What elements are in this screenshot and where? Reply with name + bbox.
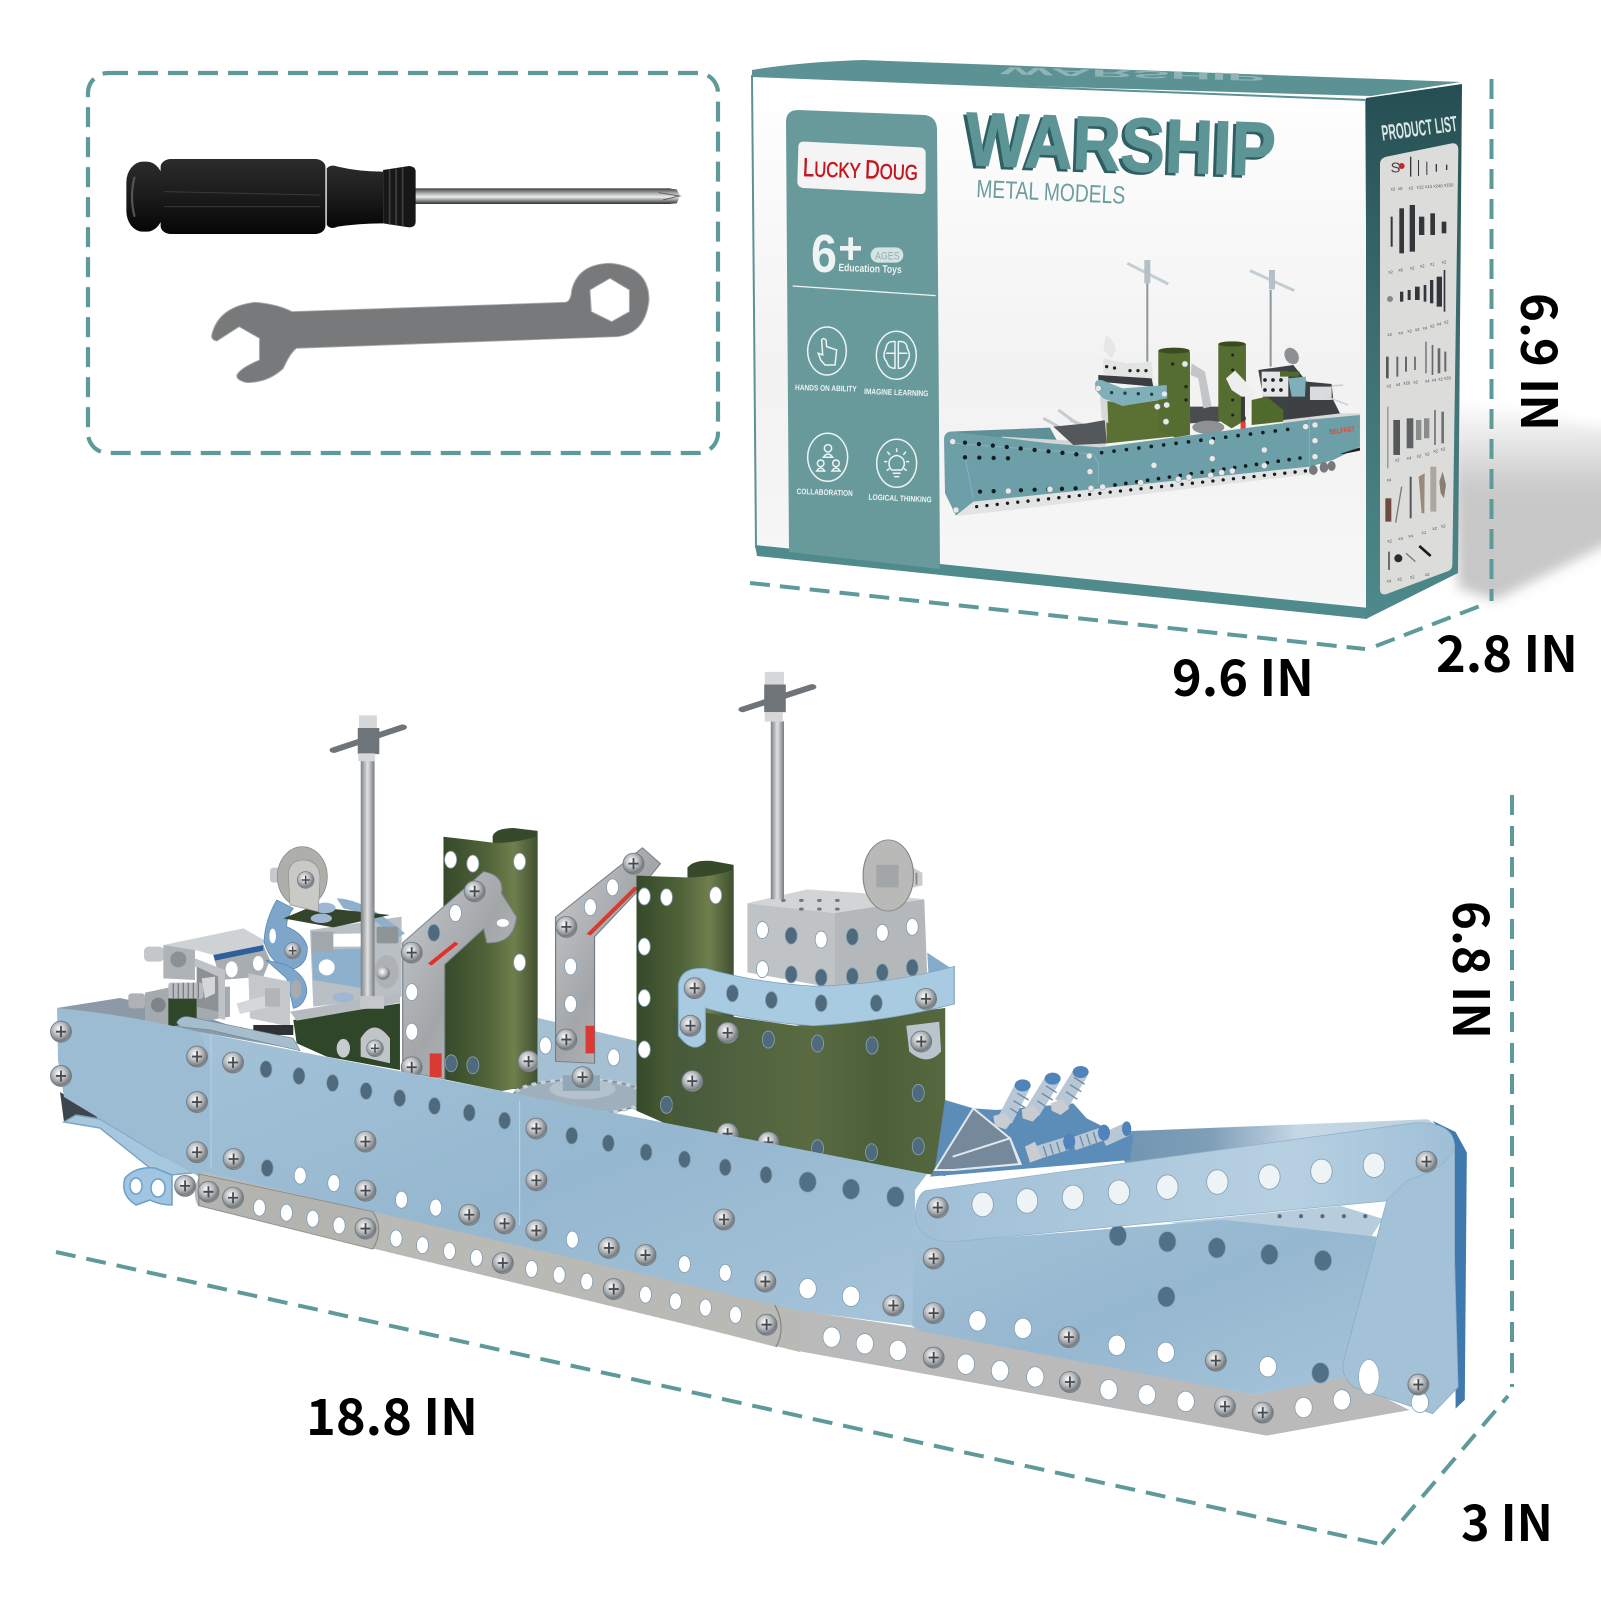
box heading: WARSHIP: WARSHIP [961,99,1274,195]
parts quantities: x2 [1410,574,1415,579]
parts quantities: x4 [1423,325,1428,330]
bow lower fasteners [1359,1360,1429,1413]
parts quantities: x2 [1415,327,1420,332]
parts quantities: x150 [1444,183,1454,188]
parts quantities: x2 [1442,259,1447,264]
parts quantities: x2 [1387,383,1392,388]
parts quantities: x12 [1417,185,1424,190]
parts quantities: x4 [1432,378,1437,383]
parts quantities: x2 [1433,449,1438,454]
steel bracket [1191,363,1212,408]
green top plate [283,903,390,927]
parts quantities: x4 [1425,379,1430,384]
parts quantities: x5 [1398,186,1403,191]
parts quantities: x2 [1391,187,1396,192]
midship holes near bow [799,1172,904,1316]
bow interior rim [1106,1119,1456,1237]
box bottom stripe [755,545,1369,619]
icon: hands on ability [808,327,846,375]
gear [1192,421,1224,434]
bow lower plate [912,1214,1377,1395]
label: box length: 9.6 IN [1172,639,1314,711]
forward mast [743,672,812,899]
parts quantities: x2 [1444,319,1449,324]
gear turret [512,1018,647,1114]
parts quantities: x4 [1398,536,1403,541]
upright bolts [993,1066,1089,1129]
age badge: 6 [811,223,837,284]
silver keel strip: aft [195,1172,800,1352]
brand and feature icons [793,142,936,504]
parts quantities: x4 [1398,330,1403,335]
ship dimension lines [56,795,1512,1544]
forward bracket [556,848,660,1063]
aft machinery [1252,345,1348,425]
hull joints and holes [50,1021,777,1335]
dashed tool frame [88,73,718,453]
bow plate holes [923,1225,1332,1383]
panel: included tools [88,73,718,453]
parts quantities [1387,183,1454,584]
blue deck plate [930,1100,1133,1177]
divider [793,286,936,296]
centre frame [310,898,405,1007]
parts quantities: x1 [1430,261,1435,266]
funnel two [1218,341,1246,428]
label: ship width: 3 IN [1461,1484,1553,1556]
green cabin [1106,398,1173,443]
hull: midship [199,1032,927,1326]
main ship model [50,672,1467,1436]
hull holes [965,428,1308,507]
parts quantities: x2 [1441,447,1446,452]
box top face: WARSHIP [1000,64,1265,83]
parts quantities: x2 [1438,377,1443,382]
icon: collaboration [808,433,848,481]
strip holes [927,1151,1437,1218]
parts quantities: x2 [1430,323,1435,328]
parts quantities: x4 [1408,533,1413,538]
green cabin [672,1008,945,1176]
parts quantities: x4 [1387,579,1392,584]
icon: wrench [212,263,649,383]
silver keel strip: bow [800,1311,1410,1436]
stern underside [60,1092,202,1176]
parts quantities: x20 [1444,375,1452,380]
blue strap [678,953,954,1047]
parts quantities: x4 [1407,455,1412,460]
bridge block [1098,335,1153,387]
parts quantities: x2 [1387,539,1392,544]
label: collaboration: COLLABORATION [797,487,853,498]
hull [944,415,1360,516]
parts quantities: x2 [1420,263,1425,268]
angle bracket [935,1108,1021,1170]
cabin links [1100,397,1108,423]
forward funnel [637,861,734,1127]
box front face [752,76,1370,612]
forward bolts [1043,410,1097,430]
aft bracket [401,872,517,1079]
label: box depth: 2.8 IN [1436,615,1578,687]
blue links [264,900,307,1008]
icon: screwdriver [126,159,680,234]
blue band [1095,361,1188,425]
upper sheer strip [915,1123,1455,1242]
stern plate [57,1008,212,1176]
white crane [1226,371,1255,429]
funnel one [1158,348,1190,437]
deck rim plate [177,1017,300,1051]
bow fittings [1309,447,1360,475]
parts quantities: x240 [1433,183,1443,188]
bow section [799,1121,1467,1436]
superstructure [334,672,954,1176]
back rim and deck [950,407,1360,450]
bow edge [1433,1121,1467,1409]
box heading: WARSHIP: WARSHIP [964,97,1277,193]
parts quantities: x2 [1425,572,1430,577]
logo: Lucky Doug: LUCKY DOUG [802,152,918,186]
inner angle [953,1138,1019,1164]
threaded bolt bracket [168,958,225,1020]
parts quantities: x2 [1395,458,1400,463]
logo: Lucky Doug [797,142,926,194]
aft washer [270,847,327,912]
parts quantities: x2 [1417,453,1422,458]
second bolt bracket [237,973,293,1035]
keel joint [690,1280,781,1347]
aft mast [334,715,403,1009]
label: logical thinking: LOGICAL THINKING [868,493,932,504]
parts quantities: x2 [1387,332,1392,337]
bridge washer [863,840,922,911]
stern interior [57,998,300,1050]
masts [1127,260,1294,367]
box side face [1366,84,1462,619]
side panel: features [786,110,940,569]
parts quantities: x4 [1387,478,1392,483]
label: imagine learning: IMAGINE LEARNING [864,387,929,398]
parts sheet [1380,143,1458,594]
parts quantities: x13 [1425,184,1433,189]
label: ship height: 6.8 IN [1438,901,1510,1039]
panel: product box [752,60,1462,619]
box cast shadow [1450,400,1601,600]
age badge: Education Toys [838,262,902,276]
ship name: BELFAST [1328,424,1356,436]
parts quantities: x2 [1388,269,1393,274]
parts quantities: x2 [1409,185,1414,190]
label: hands on ability: HANDS ON ABILITY [795,383,857,394]
silver keel [957,467,1312,516]
parts quantities: x2 [1441,523,1446,528]
parts icons [1385,157,1447,570]
aft funnel [443,828,539,1091]
label: ship length: 18.8 IN [306,1378,478,1450]
box ship image [944,260,1360,516]
label: box height: 6.9 IN [1506,293,1578,431]
parts quantities: x1 [1422,530,1427,535]
parts quantities: x20 [1403,381,1411,386]
forward machinery [1053,420,1107,445]
text: PRODUCT LIST [1380,111,1459,146]
icon: imagine learning [876,331,916,379]
parts quantities: x2 [1407,329,1412,334]
box dimension lines [750,79,1492,649]
hull rivets [950,422,1318,513]
parts quantities: x4 [1396,382,1401,387]
parts icons: S [1391,161,1401,177]
keel holes [823,1327,1351,1423]
stern lugs [124,1168,172,1205]
hull seams [955,418,1309,498]
upper steel box [144,928,270,980]
parts quantities: x4 [1437,321,1442,326]
green lower box [290,992,400,1070]
lower steel box [128,987,230,1027]
side panel: product list [1380,111,1459,594]
bow front plate [1343,1124,1458,1414]
parts quantities: x2 [1425,451,1430,456]
parts quantities: x2 [1413,379,1418,384]
deck bolts [930,1066,1133,1177]
bridge block [747,889,927,988]
parts quantities: x6 [1398,267,1403,272]
box top face [752,60,1461,96]
box subheading: METAL MODELS [976,175,1126,210]
age badge: AGES [875,251,900,263]
aft machinery detail [128,847,405,1070]
age badge [811,223,903,284]
parts quantities: x2 [1432,526,1437,531]
parts quantities: x2 [1410,265,1415,270]
parts quantities: x2 [1397,577,1402,582]
lying bolts [1025,1121,1131,1163]
icon: logical thinking [877,439,917,487]
